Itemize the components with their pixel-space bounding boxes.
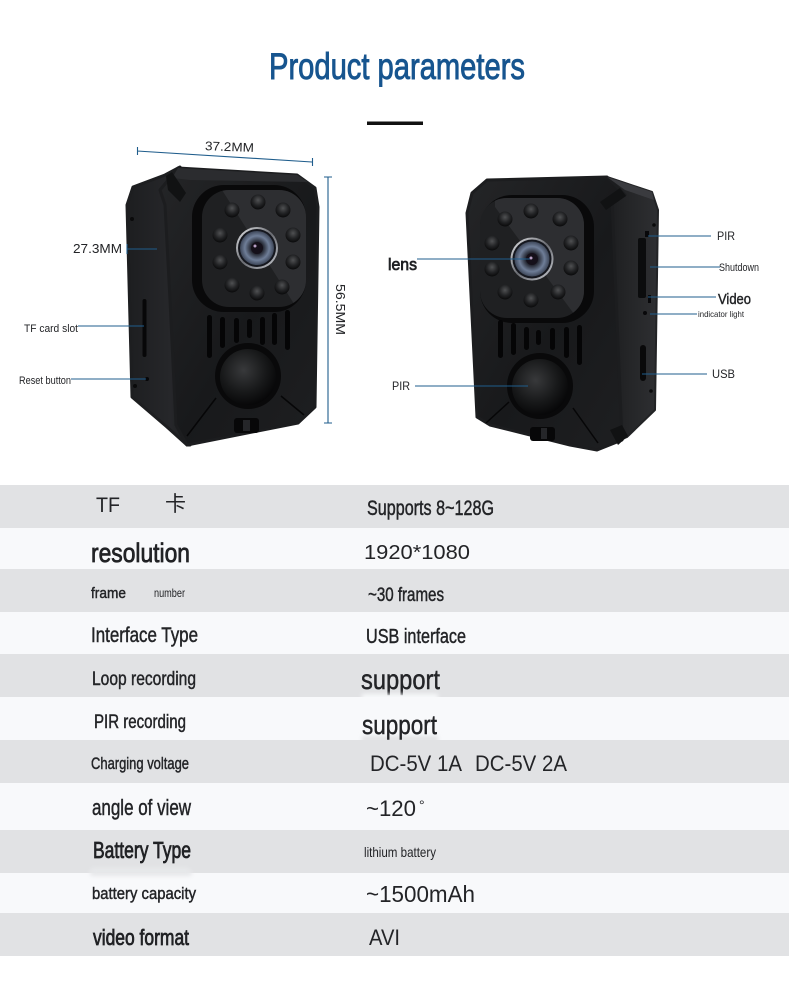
- callout: Reset button: [19, 375, 146, 387]
- row: resolution: 1920*1080: [364, 542, 470, 564]
- row: resolution: [0, 528, 789, 569]
- row: TF card: 卡: [165, 493, 186, 516]
- callout: PIR front: PIR: [392, 381, 410, 393]
- row: TF card: Supports 8~128G: [367, 497, 494, 520]
- row: battery capacity: battery capacity: [92, 884, 196, 903]
- row: video format: AVI: [369, 925, 400, 950]
- LED module: [480, 195, 594, 323]
- LED module: [192, 185, 306, 312]
- row: charging voltage: [0, 740, 789, 783]
- row: loop recording: [0, 654, 789, 697]
- clip: [530, 427, 555, 441]
- row: video format: [0, 913, 789, 956]
- callout: Video: [648, 291, 751, 308]
- USB port: [640, 345, 646, 381]
- callout: PIR side: [648, 231, 735, 243]
- dimension: height 56.5MM: [324, 177, 347, 423]
- right camera: [467, 177, 658, 450]
- lens: [510, 238, 554, 280]
- row: interface type: Interface Type: [91, 624, 198, 647]
- camera body front: [160, 168, 318, 445]
- callout: TF card slot: [24, 323, 144, 335]
- row: battery type: lithium battery: [364, 844, 436, 860]
- row: TF card: [0, 485, 789, 528]
- callout: Shutdown: [650, 262, 759, 274]
- PIR dome: [187, 343, 304, 436]
- callout: PIR front: [392, 381, 528, 393]
- row: angle of view: angle of view: [92, 795, 191, 820]
- dimension: width 37.2MM: 37.2MM: [205, 139, 254, 155]
- lens: [236, 227, 278, 269]
- callout: PIR side: PIR: [717, 231, 735, 243]
- vents: [207, 310, 290, 358]
- row: battery capacity: [0, 870, 789, 913]
- callout: indicator light: indicator light: [698, 309, 745, 319]
- callout: USB: USB: [712, 369, 735, 381]
- left camera: [127, 167, 318, 445]
- row: interface type: [0, 612, 789, 654]
- row: loop recording: support: [361, 664, 440, 695]
- title underline: [367, 122, 423, 125]
- row: PIR recording: PIR recording: [94, 712, 186, 733]
- clip: [234, 418, 259, 433]
- row: charging voltage: Charging voltage: [91, 754, 189, 773]
- row: battery capacity: ~1500mAh: [366, 881, 475, 907]
- dimension: height 56.5MM: 56.5MM: [333, 284, 347, 335]
- row: frame number: ~30 frames: [368, 585, 444, 606]
- row: battery type: Battery Type: [93, 837, 191, 863]
- title: Product parameters: [269, 46, 525, 87]
- callout: Video: Video: [718, 291, 751, 308]
- row: battery type: [0, 830, 789, 877]
- callout: lens: lens: [388, 255, 417, 274]
- row: angle of view: [0, 783, 789, 830]
- row: charging voltage: DC-5V 2A: [475, 751, 567, 776]
- dimension: width 37.2MM: [137, 139, 312, 166]
- row: angle of view: °: [419, 797, 425, 813]
- row: PIR recording: [0, 694, 789, 742]
- row: angle of view: ~120: [366, 796, 416, 821]
- callout: indicator light: [650, 309, 745, 319]
- dimension: depth 27.3MM: [73, 242, 157, 256]
- row: PIR recording: support: [362, 710, 437, 740]
- callout: Reset button: Reset button: [19, 375, 71, 387]
- row: frame number: frame: [91, 585, 126, 602]
- camera body front: [467, 177, 625, 450]
- row: frame number: number: [154, 586, 185, 600]
- vents: [498, 320, 582, 365]
- callout: USB: [642, 369, 735, 381]
- row: loop recording: Loop recording: [92, 669, 196, 690]
- parameter table: [0, 485, 789, 956]
- row: interface type: USB interface: [366, 626, 466, 648]
- row: frame number: [0, 569, 789, 612]
- PIR dome: [486, 353, 598, 443]
- camera body side: [127, 167, 200, 445]
- callout: Shutdown: Shutdown: [719, 262, 759, 274]
- callout: TF card slot: TF card slot: [24, 323, 78, 335]
- row: charging voltage: DC-5V 1A: [370, 751, 462, 776]
- side switch slot: [638, 238, 646, 298]
- row: TF card: TF: [96, 494, 120, 517]
- row: video format: video format: [93, 925, 189, 950]
- camera body side: [597, 177, 658, 450]
- dimension: depth 27.3MM: 27.3MM: [73, 242, 122, 256]
- row: resolution: resolution: [91, 538, 190, 568]
